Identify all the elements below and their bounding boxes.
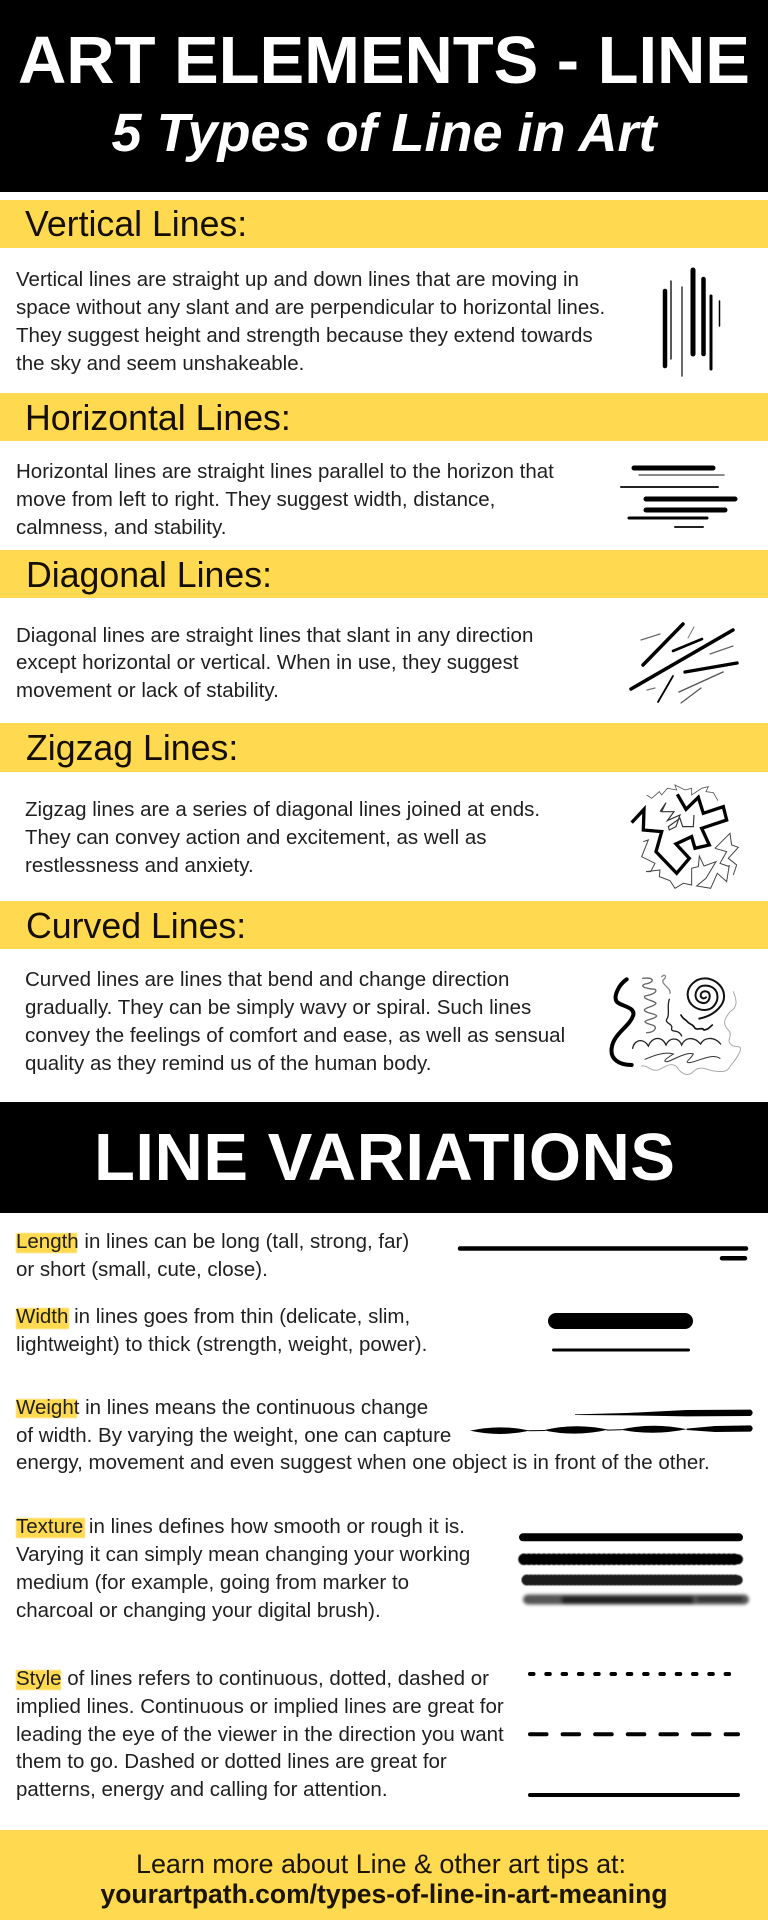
line sample: dotted, dashed, solid [530, 1674, 738, 1795]
icon: horizontal lines [621, 468, 735, 527]
text block: length: or short (small, cute, close). [16, 1258, 268, 1281]
text block: style [16, 1667, 504, 1801]
text block: vertical lines: They suggest height and strength because they extend towards [16, 324, 593, 347]
panel: vertical lines [0, 200, 768, 376]
text block: length [16, 1230, 409, 1281]
text block: width: Width in lines goes from thin (delicate, slim, [16, 1305, 410, 1328]
text block: diagonal lines: Diagonal lines are straight lines that slant in any direction [16, 624, 533, 647]
text block: length: Length in lines can be long (tall, strong, far) [16, 1230, 409, 1253]
text block: weight: energy, movement and even suggest when one object is in front of the other. [16, 1451, 710, 1474]
text block: diagonal lines: movement or lack of stability. [16, 679, 279, 702]
text block: style: Style of lines refers to continuous, dotted, dashed or [16, 1667, 489, 1690]
text block: zigzag lines: restlessness and anxiety. [25, 854, 254, 877]
icon: zigzag lines [632, 785, 738, 888]
highlight: texture [16, 1518, 85, 1538]
subtitle: 5 Types of Line in Art [112, 103, 659, 163]
highlight: width [16, 1308, 69, 1329]
text block: curved lines [25, 968, 565, 1075]
text block: weight [16, 1396, 710, 1474]
variation: width [16, 1305, 693, 1356]
text block: horizontal lines: Horizontal lines are straight lines parallel to the horizon that [16, 460, 554, 483]
icon: curved lines [611, 975, 741, 1074]
text block: width [16, 1305, 427, 1356]
footer panel [0, 1830, 768, 1920]
text block: zigzag lines: They can convey action and excitement, as well as [25, 826, 486, 849]
text block: vertical lines: space without any slant and are perpendicular to horizontal lines. [16, 296, 605, 319]
highlight: style [16, 1670, 61, 1690]
text block: horizontal lines: calmness, and stability. [16, 516, 226, 539]
text block: style: leading the eye of the viewer in the direction you want [16, 1723, 504, 1746]
text block: weight: Weight in lines means the continuous change [16, 1396, 428, 1419]
variation: length [16, 1230, 746, 1281]
text block: vertical lines: the sky and seem unshakeable. [16, 352, 304, 375]
panel: horizontal lines [0, 393, 768, 539]
text block: zigzag lines [25, 798, 540, 877]
header panel [0, 0, 768, 192]
text block: curved lines: convey the feelings of comfort and ease, as well as sensual [25, 1024, 565, 1047]
text block: vertical lines: Vertical lines are straight up and down lines that are moving in [16, 268, 579, 291]
variation: texture [16, 1515, 744, 1622]
line sample: thick and thin [548, 1313, 693, 1352]
line sample: long and short [460, 1248, 746, 1258]
text block: curved lines: quality as they remind us of the human body. [25, 1052, 431, 1075]
panel: zigzag lines [0, 723, 768, 888]
text block: diagonal lines: except horizontal or vertical. When in use, they suggest [16, 651, 519, 674]
heading: horizontal lines: Horizontal Lines: [25, 398, 291, 438]
highlight: length [16, 1233, 77, 1253]
text block: style: them to go. Dashed or dotted lines are great for [16, 1750, 447, 1773]
text block: texture: Varying it can simply mean changing your working [16, 1543, 470, 1566]
panel: diagonal lines [0, 550, 768, 703]
text block: texture: Texture in lines defines how smooth or rough it is. [16, 1515, 465, 1538]
text block: texture: medium (for example, going from marker to [16, 1571, 409, 1594]
panel: curved lines [0, 901, 768, 1075]
text block: texture [16, 1515, 470, 1622]
text block: curved lines: Curved lines are lines that bend and change direction [25, 968, 509, 991]
highlight: weight [16, 1399, 77, 1418]
text block: diagonal lines [16, 624, 533, 702]
footer text: Learn more about Line & other art tips at: [136, 1849, 626, 1879]
heading: diagonal lines: Diagonal Lines: [26, 555, 272, 595]
text block: zigzag lines: Zigzag lines are a series of diagonal lines joined at ends. [25, 798, 540, 821]
heading: zigzag lines: Zigzag Lines: [26, 728, 238, 768]
heading: vertical lines: Vertical Lines: [25, 204, 247, 244]
text block: texture: charcoal or changing your digital brush). [16, 1599, 381, 1622]
text block: width: lightweight) to thick (strength, weight, power). [16, 1333, 427, 1356]
icon: diagonal lines [631, 624, 737, 703]
text block: curved lines: gradually. They can be simply wavy or spiral. Such lines [25, 996, 531, 1019]
text block: vertical lines [16, 268, 605, 375]
text block: style: patterns, energy and calling for attention. [16, 1778, 388, 1801]
line sample: textures [523, 1537, 744, 1600]
heading: line variations: LINE VARIATIONS [94, 1120, 675, 1195]
variation: weight [16, 1396, 753, 1474]
panel: line variations banner [0, 1102, 768, 1213]
footer link: yourartpath.com/types-of-line-in-art-meaning [100, 1879, 668, 1909]
text block: style: implied lines. Continuous or implied lines are great for [16, 1695, 504, 1718]
text block: weight: of width. By varying the weight, one can capture [16, 1424, 451, 1447]
variation: style [16, 1667, 738, 1801]
title: ART ELEMENTS - LINE [18, 23, 750, 98]
text block: horizontal lines [16, 460, 554, 539]
line sample: varying weight [470, 1410, 753, 1434]
heading: curved lines: Curved Lines: [26, 906, 246, 946]
icon: vertical lines [665, 270, 720, 376]
text block: horizontal lines: move from left to right. They suggest width, distance, [16, 488, 495, 511]
